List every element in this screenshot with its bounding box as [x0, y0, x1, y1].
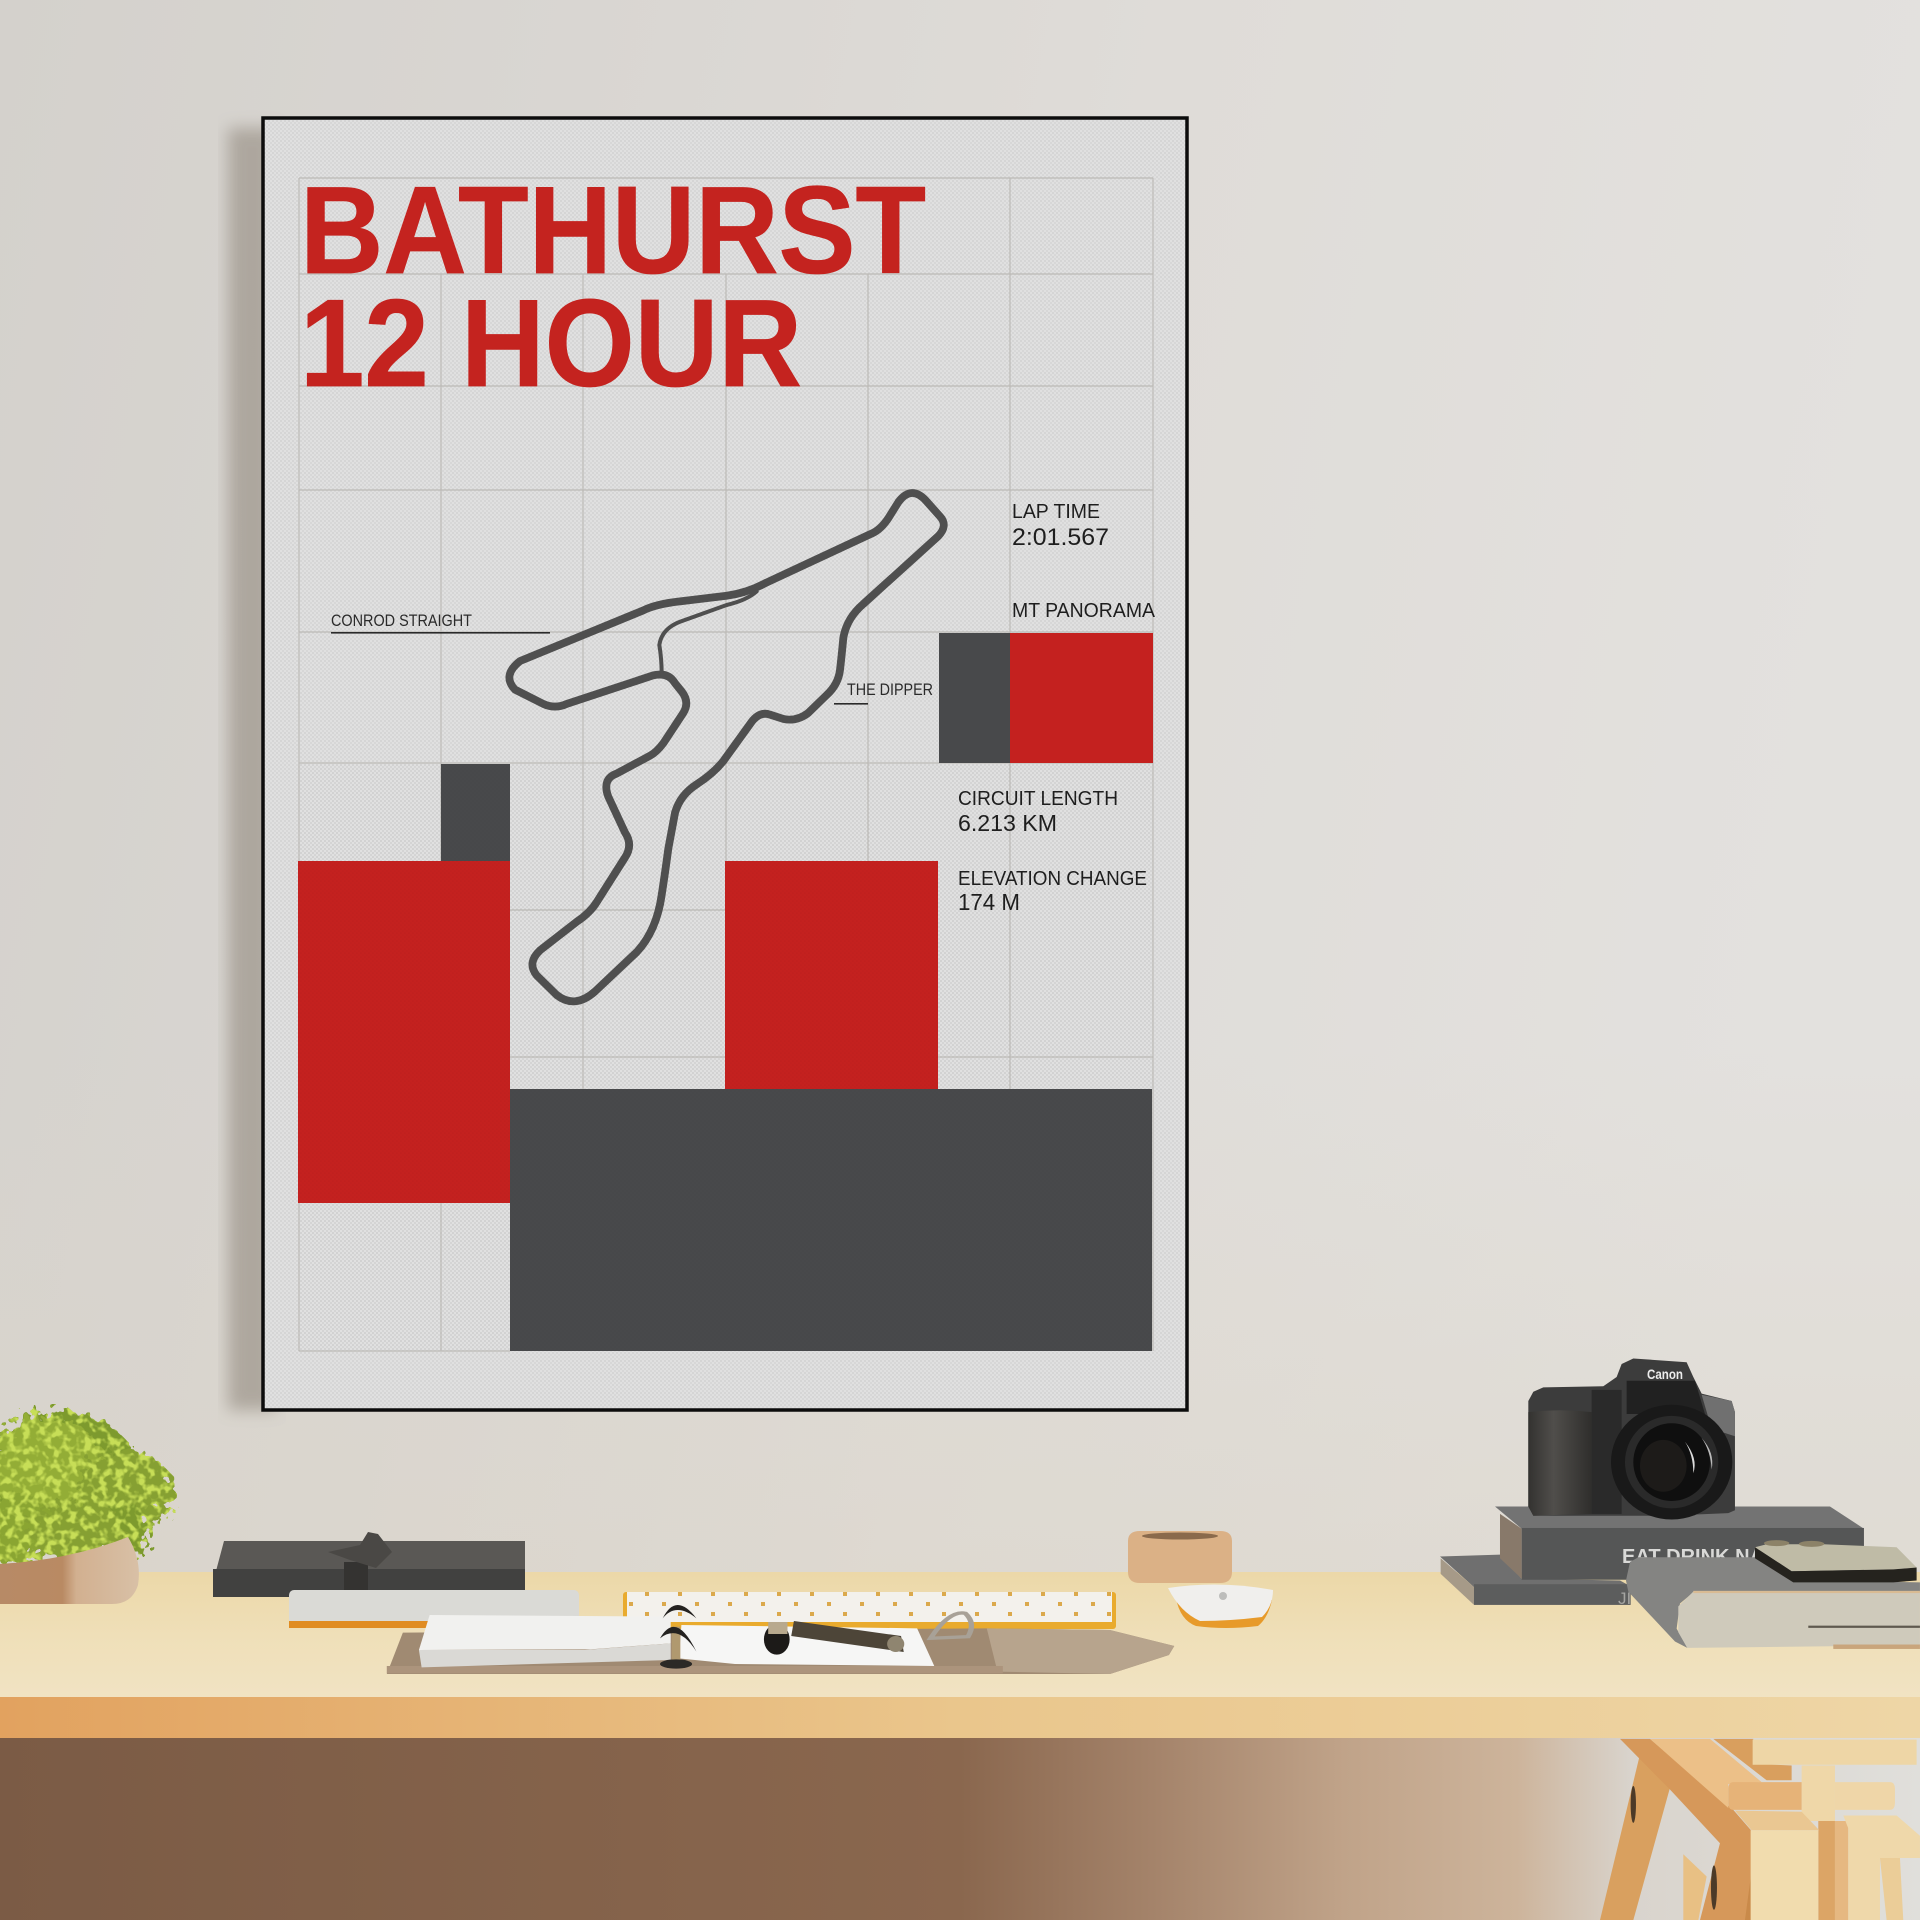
open binder	[419, 1605, 934, 1669]
title: BATHURST	[300, 162, 926, 300]
prism front	[1627, 1381, 1705, 1414]
colour block: left red	[298, 861, 510, 1203]
post lower	[1818, 1821, 1835, 1920]
colour block: large dark	[510, 1089, 1152, 1351]
desk	[0, 1572, 1920, 1738]
plant in wooden pot	[0, 1410, 173, 1604]
wooden cup	[1128, 1531, 1232, 1583]
rings	[663, 1605, 696, 1618]
poster frame and canvas	[263, 118, 1187, 1410]
stat: elevation change: ELEVATION CHANGE	[958, 867, 1147, 890]
pages	[1678, 1592, 1920, 1648]
leather notebook	[213, 1532, 525, 1597]
top beam	[1753, 1740, 1917, 1765]
label: The Dipper	[834, 681, 933, 705]
peg right	[1835, 1782, 1895, 1810]
brace top face	[1650, 1739, 1762, 1808]
left pages	[419, 1615, 671, 1650]
rear brace	[1713, 1739, 1792, 1780]
lower book	[1440, 1555, 1630, 1587]
lens	[1611, 1405, 1732, 1519]
desk top	[0, 1572, 1920, 1698]
brace tail	[1745, 1858, 1789, 1920]
large grey book	[1626, 1557, 1920, 1649]
stat: lap time: LAP TIME	[1012, 500, 1100, 523]
cover	[1626, 1557, 1920, 1648]
stat: lap time	[1012, 500, 1109, 551]
upper book pages	[1500, 1514, 1522, 1579]
circuit track map	[509, 493, 944, 1001]
title	[300, 162, 926, 413]
upper book top	[1495, 1506, 1864, 1529]
camera	[1528, 1358, 1735, 1519]
front block top	[1735, 1811, 1819, 1830]
camera body	[1528, 1358, 1735, 1516]
right shoulder	[1702, 1395, 1735, 1436]
keyboard	[623, 1592, 1116, 1629]
foliage	[0, 1410, 173, 1566]
pot	[0, 1537, 139, 1604]
right page	[679, 1625, 934, 1666]
stat: circuit length	[958, 787, 1118, 836]
stat: circuit length: 6.213 KM	[958, 810, 1057, 836]
title: 12 HOUR	[300, 275, 802, 413]
colour block: Mt Panorama dark	[939, 633, 1010, 763]
right leg	[1880, 1858, 1903, 1920]
tablet with orange edge	[289, 1590, 579, 1628]
lower book title text: JI	[1618, 1589, 1631, 1608]
poster grid lines	[299, 178, 1153, 1351]
brace side	[1620, 1739, 1753, 1920]
pen	[764, 1613, 971, 1655]
under-desk shadow area	[0, 1735, 1920, 1920]
upper book spine	[1522, 1528, 1864, 1580]
stat: elevation change	[958, 867, 1147, 915]
stat: Mt Panorama heading: MT PANORAMA	[1012, 599, 1155, 622]
grip	[1528, 1410, 1592, 1516]
centre panel	[1592, 1390, 1622, 1514]
stat: circuit length: CIRCUIT LENGTH	[958, 787, 1118, 810]
right block face	[1843, 1815, 1920, 1920]
left leg	[1600, 1754, 1670, 1920]
right block side	[1835, 1821, 1848, 1920]
poster shadow on wall	[228, 128, 276, 1410]
upright post	[1802, 1766, 1835, 1821]
binder mat	[387, 1628, 1174, 1674]
stat: elevation change: 174 M	[958, 889, 1020, 915]
ring post	[672, 1627, 680, 1662]
poster	[263, 118, 1187, 1410]
canvas weave over blocks	[298, 764, 1153, 1351]
brand plate: Canon	[1647, 1366, 1683, 1382]
label: The Dipper: THE DIPPER	[847, 681, 933, 699]
desk front edge	[0, 1697, 1920, 1738]
phone	[1755, 1540, 1917, 1582]
colour block: small dark	[441, 764, 510, 861]
colour block: middle red	[725, 861, 938, 1089]
stacked books	[1440, 1506, 1864, 1605]
stat: lap time: 2:01.567	[1012, 524, 1109, 551]
label: Conrod Straight: CONROD STRAIGHT	[331, 612, 472, 630]
colour block: Mt Panorama red	[1010, 633, 1153, 763]
book title text: EAT DRINK NA	[1622, 1546, 1764, 1568]
peg left	[1728, 1782, 1802, 1810]
rear leg	[1683, 1854, 1707, 1920]
mouse	[1168, 1584, 1273, 1628]
front block	[1751, 1830, 1818, 1920]
trestle leg	[1600, 1739, 1920, 1920]
